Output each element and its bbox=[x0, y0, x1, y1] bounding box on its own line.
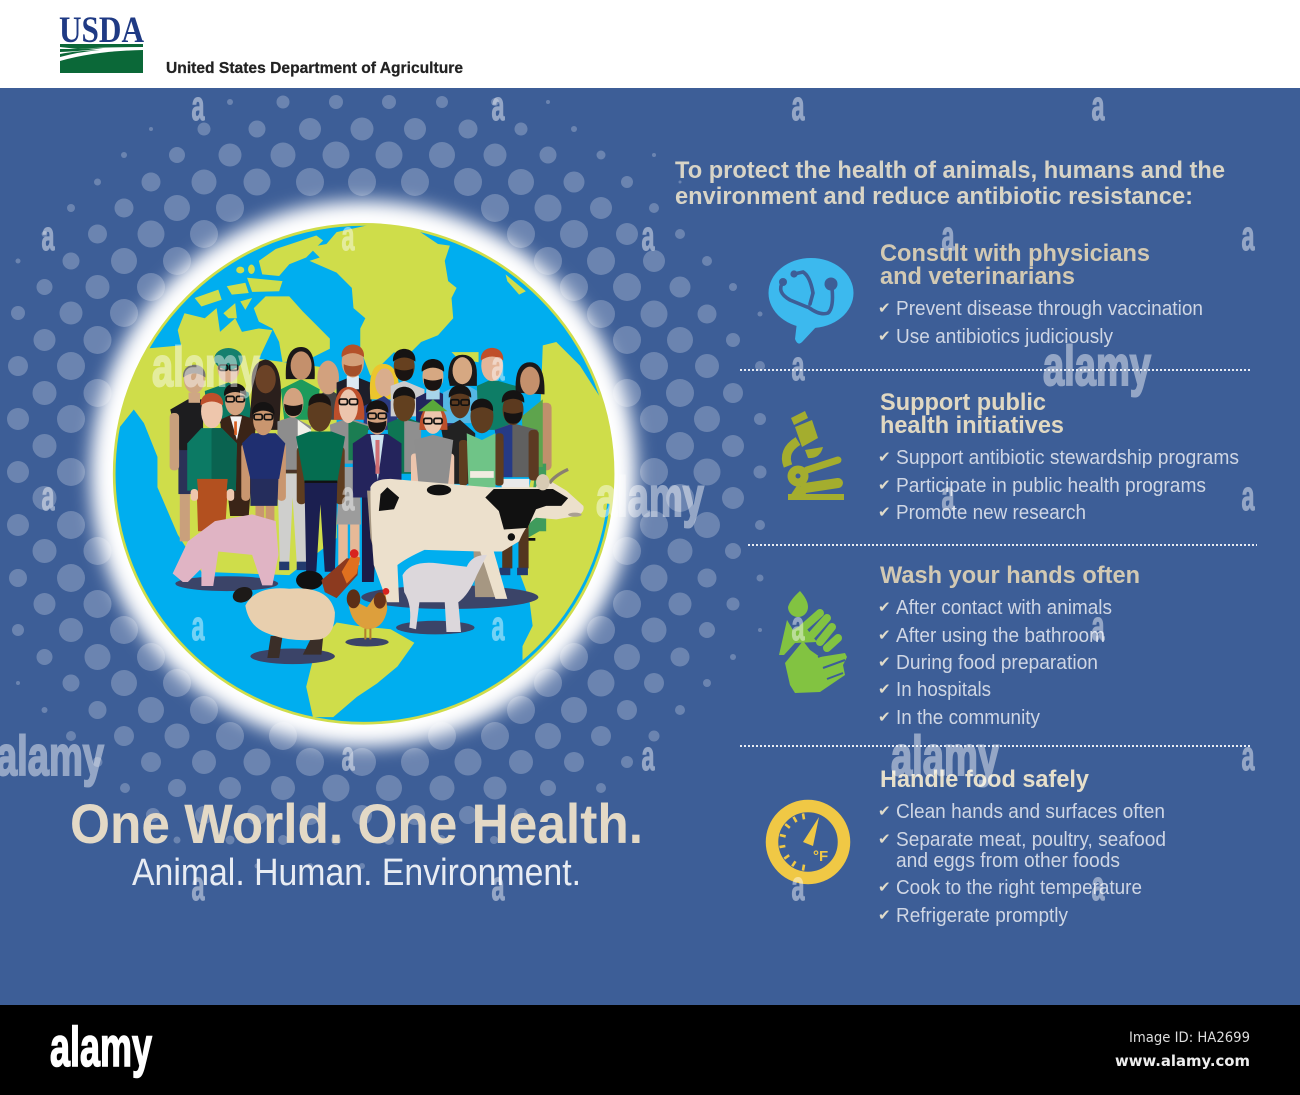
section: public health: ✔ bbox=[878, 448, 891, 466]
panel heading: environment and reduce antibiotic resistance: bbox=[675, 183, 1193, 210]
section: public health: Support antibiotic stewardship programs bbox=[896, 447, 1239, 469]
panel heading bbox=[675, 157, 1225, 210]
person: dark-skinned man, green and grey top bbox=[387, 387, 421, 474]
section: public health: Support public bbox=[880, 389, 1046, 416]
section: handle food: Refrigerate promptly bbox=[896, 905, 1068, 927]
stock-photo watermarks: a bbox=[192, 602, 205, 649]
section: handle food: and eggs from other foods bbox=[896, 850, 1120, 872]
USDA logo: USDA bbox=[59, 10, 144, 51]
section: wash hands: ✔ bbox=[878, 598, 891, 616]
stock-photo watermarks: alamy bbox=[596, 465, 704, 528]
section: wash hands bbox=[878, 562, 1140, 729]
footer bar bbox=[0, 1005, 1300, 1095]
section: wash hands: After contact with animals bbox=[896, 597, 1112, 619]
section: handle food: Clean hands and surfaces often bbox=[896, 801, 1165, 823]
section: wash hands: ✔ bbox=[878, 626, 891, 644]
stock-photo watermarks: a bbox=[342, 212, 355, 259]
section: wash hands: Wash your hands often bbox=[880, 562, 1140, 589]
subtitle: Animal. Human. Environment. bbox=[132, 852, 581, 894]
section: handle food bbox=[878, 766, 1166, 927]
stock-photo watermarks: a bbox=[42, 472, 55, 519]
person: dark man, blue and grey shirt bbox=[495, 390, 539, 575]
person: dark-skinned woman, glasses bbox=[441, 385, 475, 484]
animal: rooster bbox=[296, 549, 360, 598]
person: woman, green hat, grey tee bbox=[411, 399, 454, 487]
section: consult bbox=[878, 240, 1203, 348]
crowd of people bbox=[170, 344, 552, 582]
stock-photo watermarks: a bbox=[1242, 732, 1255, 779]
stock-photo watermarks: a bbox=[642, 212, 655, 259]
stock-photo watermarks: a bbox=[942, 212, 955, 259]
stock-photo watermarks: a bbox=[1092, 862, 1105, 909]
continents bbox=[103, 220, 621, 717]
stock-photo watermarks: alamy bbox=[891, 724, 999, 787]
section: consult: ✔ bbox=[878, 327, 891, 345]
animal: cow bbox=[361, 469, 584, 609]
section: handle food: ✔ bbox=[878, 830, 891, 848]
person: woman, light green dress bbox=[459, 399, 504, 487]
title: One World. One Health. bbox=[70, 792, 643, 855]
icon: microscope bbox=[786, 411, 844, 500]
icon: food thermometer dial bbox=[772, 806, 844, 878]
section: public health: health initiatives bbox=[880, 412, 1064, 439]
section: consult: Prevent disease through vaccination bbox=[896, 298, 1203, 320]
stock-photo watermarks: alamy bbox=[152, 335, 260, 398]
person: red-haired woman, glasses bbox=[330, 387, 369, 565]
stock-photo watermarks: a bbox=[342, 472, 355, 519]
website: www.alamy.com bbox=[1115, 1052, 1250, 1070]
section: consult: ✔ bbox=[878, 299, 891, 317]
section: handle food: Separate meat, poultry, seafood bbox=[896, 829, 1166, 851]
stock-photo watermarks: a bbox=[792, 342, 805, 389]
section: handle food: Handle food safely bbox=[880, 766, 1090, 793]
stock-photo watermarks: a bbox=[492, 342, 505, 389]
person: bearded man, navy suit, glasses bbox=[353, 400, 401, 582]
stock-photo watermarks: a bbox=[492, 602, 505, 649]
section: wash hands: After using the bathroom bbox=[896, 625, 1105, 647]
section: consult: Use antibiotics judiciously bbox=[896, 326, 1113, 348]
halftone dot field bbox=[0, 95, 766, 869]
globe illustration bbox=[103, 220, 621, 724]
department name: United States Department of Agriculture bbox=[166, 60, 463, 77]
stock-photo watermarks bbox=[0, 82, 1255, 909]
section: wash hands: In hospitals bbox=[896, 679, 991, 701]
icon: food thermometer dial: °F bbox=[813, 848, 828, 865]
person: woman, green dress bbox=[516, 362, 552, 541]
globe outline bbox=[114, 224, 613, 723]
section: public health: ✔ bbox=[878, 476, 891, 494]
section: handle food: ✔ bbox=[878, 906, 891, 924]
person: teal hat, glasses bbox=[205, 348, 252, 423]
stock-photo watermarks: a bbox=[192, 862, 205, 909]
person: grey-haired man, black tee bbox=[170, 365, 206, 541]
section: public health: ✔ bbox=[878, 503, 891, 521]
stock-photo watermarks: a bbox=[642, 732, 655, 779]
section: wash hands: During food preparation bbox=[896, 652, 1098, 674]
icon: washing hands bbox=[779, 591, 847, 693]
animal: tan sheep bbox=[231, 584, 335, 664]
person: dark-skinned man, green tee, navy pants bbox=[296, 394, 345, 572]
stock-photo watermarks: a bbox=[1092, 602, 1105, 649]
person: green shirt, black hair bbox=[281, 347, 320, 420]
stock-photo watermarks: a bbox=[792, 82, 805, 129]
person: long black hair bbox=[249, 360, 281, 430]
section: handle food: ✔ bbox=[878, 878, 891, 896]
section: handle food: Cook to the right temperature bbox=[896, 877, 1142, 899]
person: woman, navy top and shorts, glasses bbox=[241, 402, 286, 521]
header band bbox=[0, 0, 1300, 88]
panel heading: To protect the health of animals, humans and the bbox=[675, 157, 1225, 184]
person: man, brown suit, glasses bbox=[220, 383, 256, 516]
image id: Image ID: HA2699 bbox=[1129, 1030, 1250, 1046]
section: wash hands: In the community bbox=[896, 707, 1040, 729]
stock-photo watermarks: alamy bbox=[0, 724, 104, 787]
stock-photo watermarks: a bbox=[192, 82, 205, 129]
person: bald man bbox=[316, 361, 340, 420]
stock-photo watermarks: a bbox=[1242, 212, 1255, 259]
stock-photo watermarks: a bbox=[492, 82, 505, 129]
stock-photo watermarks: a bbox=[1092, 82, 1105, 129]
animal: hen bbox=[345, 588, 389, 646]
ocean bbox=[114, 224, 614, 724]
person: bald man, beard, white top bbox=[277, 388, 311, 570]
person: blonde woman bbox=[364, 364, 399, 430]
section: public health: Promote new research bbox=[896, 502, 1086, 524]
section: public health bbox=[878, 389, 1239, 524]
animal: pig bbox=[173, 514, 278, 591]
stock-photo watermarks: a bbox=[492, 862, 505, 909]
animal: grey sheep bbox=[396, 555, 487, 634]
section: consult: and veterinarians bbox=[880, 263, 1075, 290]
section: consult: Consult with physicians bbox=[880, 240, 1150, 267]
footer logo: alamy bbox=[50, 1015, 152, 1078]
stock-photo watermarks: alamy bbox=[1043, 334, 1151, 397]
stock-photo watermarks: a bbox=[942, 472, 955, 519]
person: dark-skinned man, beard bbox=[391, 349, 424, 416]
section: wash hands: ✔ bbox=[878, 708, 891, 726]
stock-photo watermarks: a bbox=[1242, 472, 1255, 519]
USDA logo bbox=[59, 10, 144, 73]
stock-photo watermarks: a bbox=[342, 732, 355, 779]
section: handle food: ✔ bbox=[878, 802, 891, 820]
person: red-haired man, teal shirt bbox=[477, 348, 516, 430]
icon: stethoscope speech bubble bbox=[768, 258, 854, 344]
white glow behind globe bbox=[91, 201, 637, 747]
person: long black hair, light blue shirt bbox=[443, 355, 484, 423]
section: wash hands: ✔ bbox=[878, 680, 891, 698]
section: public health: Participate in public health programs bbox=[896, 475, 1206, 497]
person: bearded man, navy jacket bbox=[416, 359, 455, 430]
stock-photo watermarks: a bbox=[792, 602, 805, 649]
person: red-haired bearded man bbox=[337, 344, 372, 410]
section: wash hands: ✔ bbox=[878, 653, 891, 671]
stock-photo watermarks: a bbox=[792, 862, 805, 909]
stock-photo watermarks: a bbox=[42, 212, 55, 259]
person: man, green sweater, rust pants bbox=[187, 393, 237, 531]
